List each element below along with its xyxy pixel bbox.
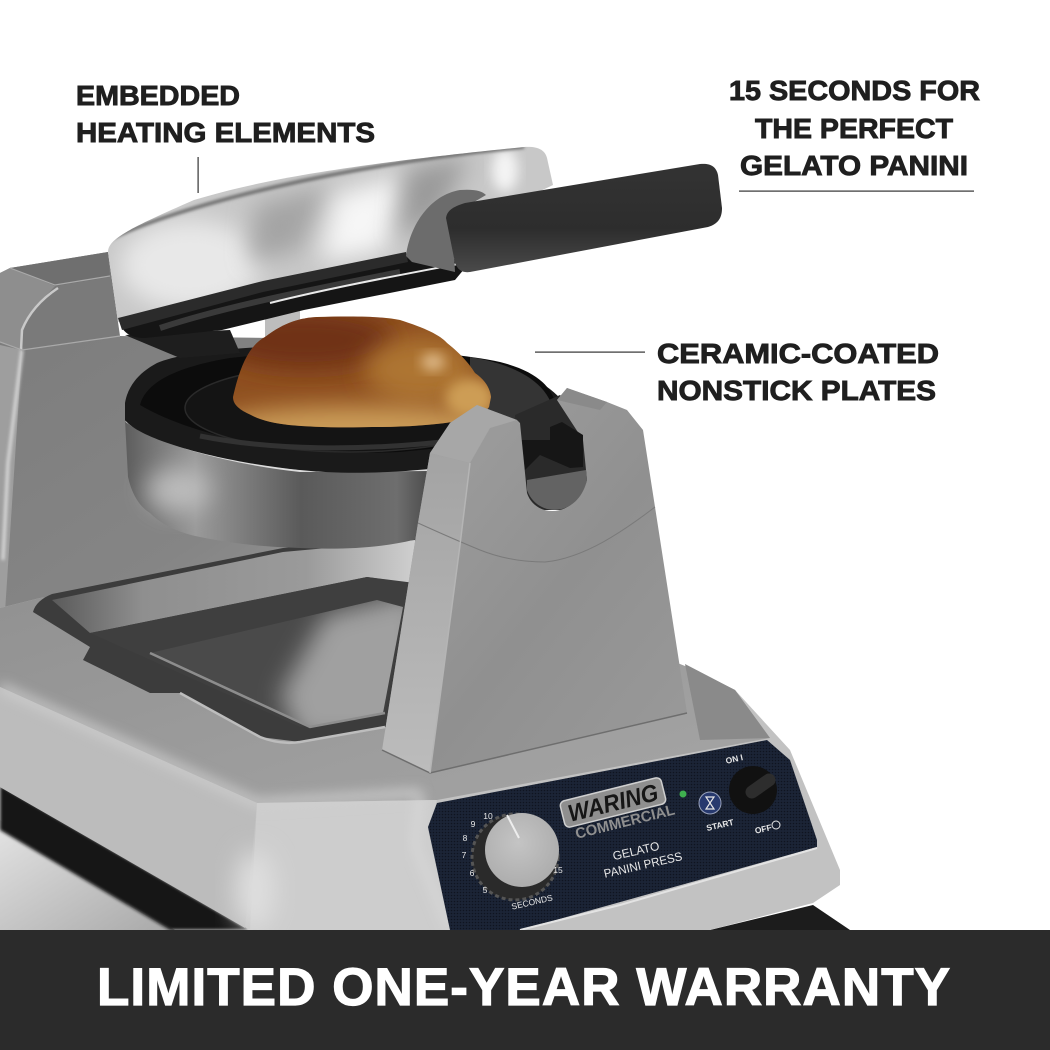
warranty banner: LIMITED ONE-YEAR WARRANTY: [97, 958, 950, 1017]
timer scale: 8: [463, 833, 468, 843]
start button: [699, 792, 735, 833]
Waring Commercial logo: [559, 775, 677, 845]
timer scale: [462, 811, 563, 912]
product name: GELATO: [611, 839, 661, 863]
callout: embedded heating elements: [76, 80, 375, 193]
callout: ceramic-coated nonstick plates: NONSTICK PLATES: [657, 375, 936, 406]
start button: START: [705, 817, 735, 833]
mechanism behind tower: [515, 395, 590, 510]
gelato panini bun: [233, 316, 491, 428]
timer scale: 6: [470, 868, 475, 878]
status light: [680, 790, 686, 798]
drip tray: [33, 535, 420, 743]
callout: 15 seconds: 15 SECONDS FOR: [729, 75, 980, 106]
upper lid underside: [118, 250, 470, 338]
timer scale: 15: [553, 865, 563, 875]
light gap above bun: [265, 306, 300, 338]
callout: 15 seconds: THE PERFECT: [755, 113, 953, 144]
timer scale: 7: [462, 850, 467, 860]
product name: PANINI PRESS: [602, 849, 684, 881]
power toggle: OFF: [754, 822, 773, 836]
power toggle: [725, 752, 780, 836]
handle hinge: [406, 190, 486, 272]
upper lid heating dome: [100, 140, 560, 330]
callout: 15 seconds: GELATO PANINI: [740, 150, 968, 181]
Waring Commercial logo: COMMERCIAL: [574, 802, 677, 843]
lower ceramic nonstick plate: [125, 345, 565, 473]
timer scale: 10: [483, 811, 493, 821]
Waring Commercial logo: WARING: [565, 779, 661, 828]
timer scale: 5: [483, 885, 488, 895]
callout: ceramic-coated nonstick plates: [535, 338, 939, 406]
callout: embedded heating elements: HEATING ELEMENTS: [76, 117, 375, 148]
power toggle: ON I: [725, 752, 744, 766]
lower cooking bowl: [125, 420, 445, 549]
control panel: [428, 740, 817, 930]
callout: ceramic-coated nonstick plates: CERAMIC-COATED: [657, 338, 939, 369]
handle: [446, 164, 722, 272]
rear housing: [0, 252, 430, 612]
timer knob: [472, 813, 559, 900]
product illustration: gelato panini press: [0, 140, 850, 930]
callout: 15 seconds: [729, 75, 980, 192]
lid hinge shadow: [125, 330, 240, 358]
callout: embedded heating elements: EMBEDDED: [76, 80, 240, 111]
hinge slot and bracket: [522, 422, 587, 510]
timer scale: 9: [471, 819, 476, 829]
warranty banner: [0, 930, 1050, 1050]
floor and shadow: [0, 785, 850, 930]
hinge tower: [382, 388, 687, 773]
base body: [0, 560, 840, 930]
timer scale: SECONDS: [510, 892, 554, 912]
